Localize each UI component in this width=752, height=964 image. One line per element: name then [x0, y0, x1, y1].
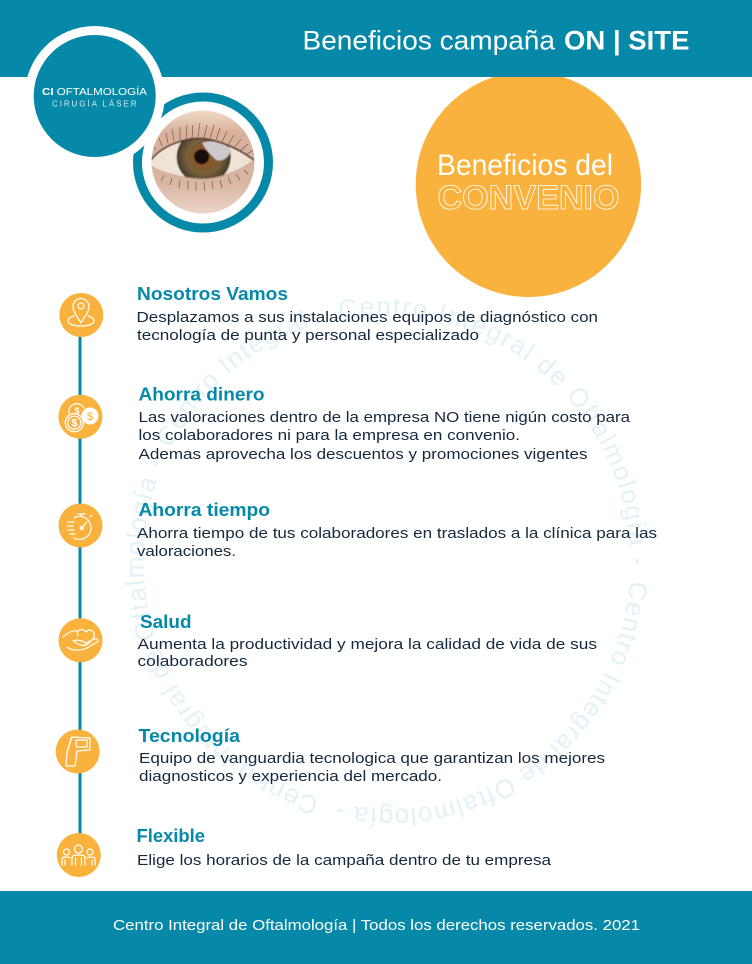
benefit: Ahorra dinero: Ademas aprovecha los descuentos y promociones vigentes [138, 446, 588, 463]
benefit: Salud [138, 612, 597, 670]
benefit: Ahorra tiempo: valoraciones. [137, 543, 236, 560]
timeline line [78, 335, 82, 835]
benefit: Ahorra dinero: Ahorra dinero [138, 384, 265, 404]
benefit: Ahorra tiempo [137, 500, 657, 560]
benefit: Nosotros Vamos: Nosotros Vamos [137, 284, 288, 304]
icon: coins: $ [71, 418, 77, 430]
benefit: Tecnología: Tecnología [138, 726, 241, 746]
icon: coins: $ [74, 406, 80, 416]
icon: group of people [57, 833, 101, 877]
benefit: Flexible [136, 826, 552, 869]
footer band [0, 891, 752, 964]
watermark: circular text: Centro Integral de Oftalmología - [126, 460, 316, 813]
benefit: Nosotros Vamos: tecnología de punta y personal especializado [137, 327, 479, 344]
benefit: Tecnología [138, 726, 605, 785]
benefit: Flexible: Flexible [136, 826, 205, 846]
logo wordmark: CI OFTALMOLOGÍA [42, 85, 147, 98]
benefit: Ahorra dinero: los colaboradores ni para la empresa en convenio. [138, 427, 520, 444]
header title: ON | SITE [564, 26, 690, 56]
benefit: Ahorra dinero [138, 384, 631, 463]
benefit: Tecnología: Equipo de vanguardia tecnologica que garantizan los mejores [139, 750, 605, 767]
watermark: circular text: Centro Integral de Oftalmología - [336, 583, 647, 828]
benefit: Nosotros Vamos [136, 284, 598, 344]
circle heading line 1: Beneficios del [437, 149, 613, 182]
benefit: Ahorra tiempo: Ahorra tiempo de tus colaboradores en traslados a la clínica para las [137, 525, 657, 542]
icon: hand with heart [58, 618, 102, 662]
logo wordmark [42, 85, 147, 108]
benefit: Tecnología: diagnosticos y experiencia del mercado. [139, 768, 442, 785]
icon: coins: $ [87, 411, 93, 423]
benefit: Nosotros Vamos: Desplazamos a sus instalaciones equipos de diagnóstico con [136, 309, 598, 326]
benefit: Flexible: Elige los horarios de la campaña dentro de tu empresa [137, 852, 552, 869]
logo wordmark: CIRUGÍA LÁSER [52, 100, 137, 108]
benefit: Salud: Aumenta la productividad y mejora la calidad de vida de sus [138, 636, 597, 653]
orange circle: beneficios del convenio [416, 72, 641, 297]
eye photo with ring [138, 97, 268, 228]
icon: coins [58, 395, 102, 439]
watermark: circular text [126, 298, 647, 828]
benefit: Ahorra dinero: Las valoraciones dentro de la empresa NO tiene nigún costo para [138, 409, 631, 426]
logo circle [25, 26, 165, 166]
circle heading line 2 outlined: CONVENIO [438, 179, 620, 217]
benefit: Ahorra tiempo: Ahorra tiempo [138, 500, 270, 520]
icon: location pin [59, 293, 103, 337]
icon: stopwatch [58, 504, 102, 548]
header title [302, 26, 690, 56]
header title: Beneficios campaña [302, 26, 556, 56]
benefit: Salud: Salud [140, 612, 192, 632]
icon: infrared thermometer [56, 730, 100, 774]
watermark: circular text: Centro Integral de Oftalmología - [340, 298, 647, 564]
header band [0, 0, 752, 77]
watermark: circular text: Centro Integral [158, 310, 308, 445]
benefit: Salud: colaboradores [138, 653, 248, 670]
footer text: Centro Integral de Oftalmología | Todos los derechos reservados. 2021 [113, 917, 640, 934]
